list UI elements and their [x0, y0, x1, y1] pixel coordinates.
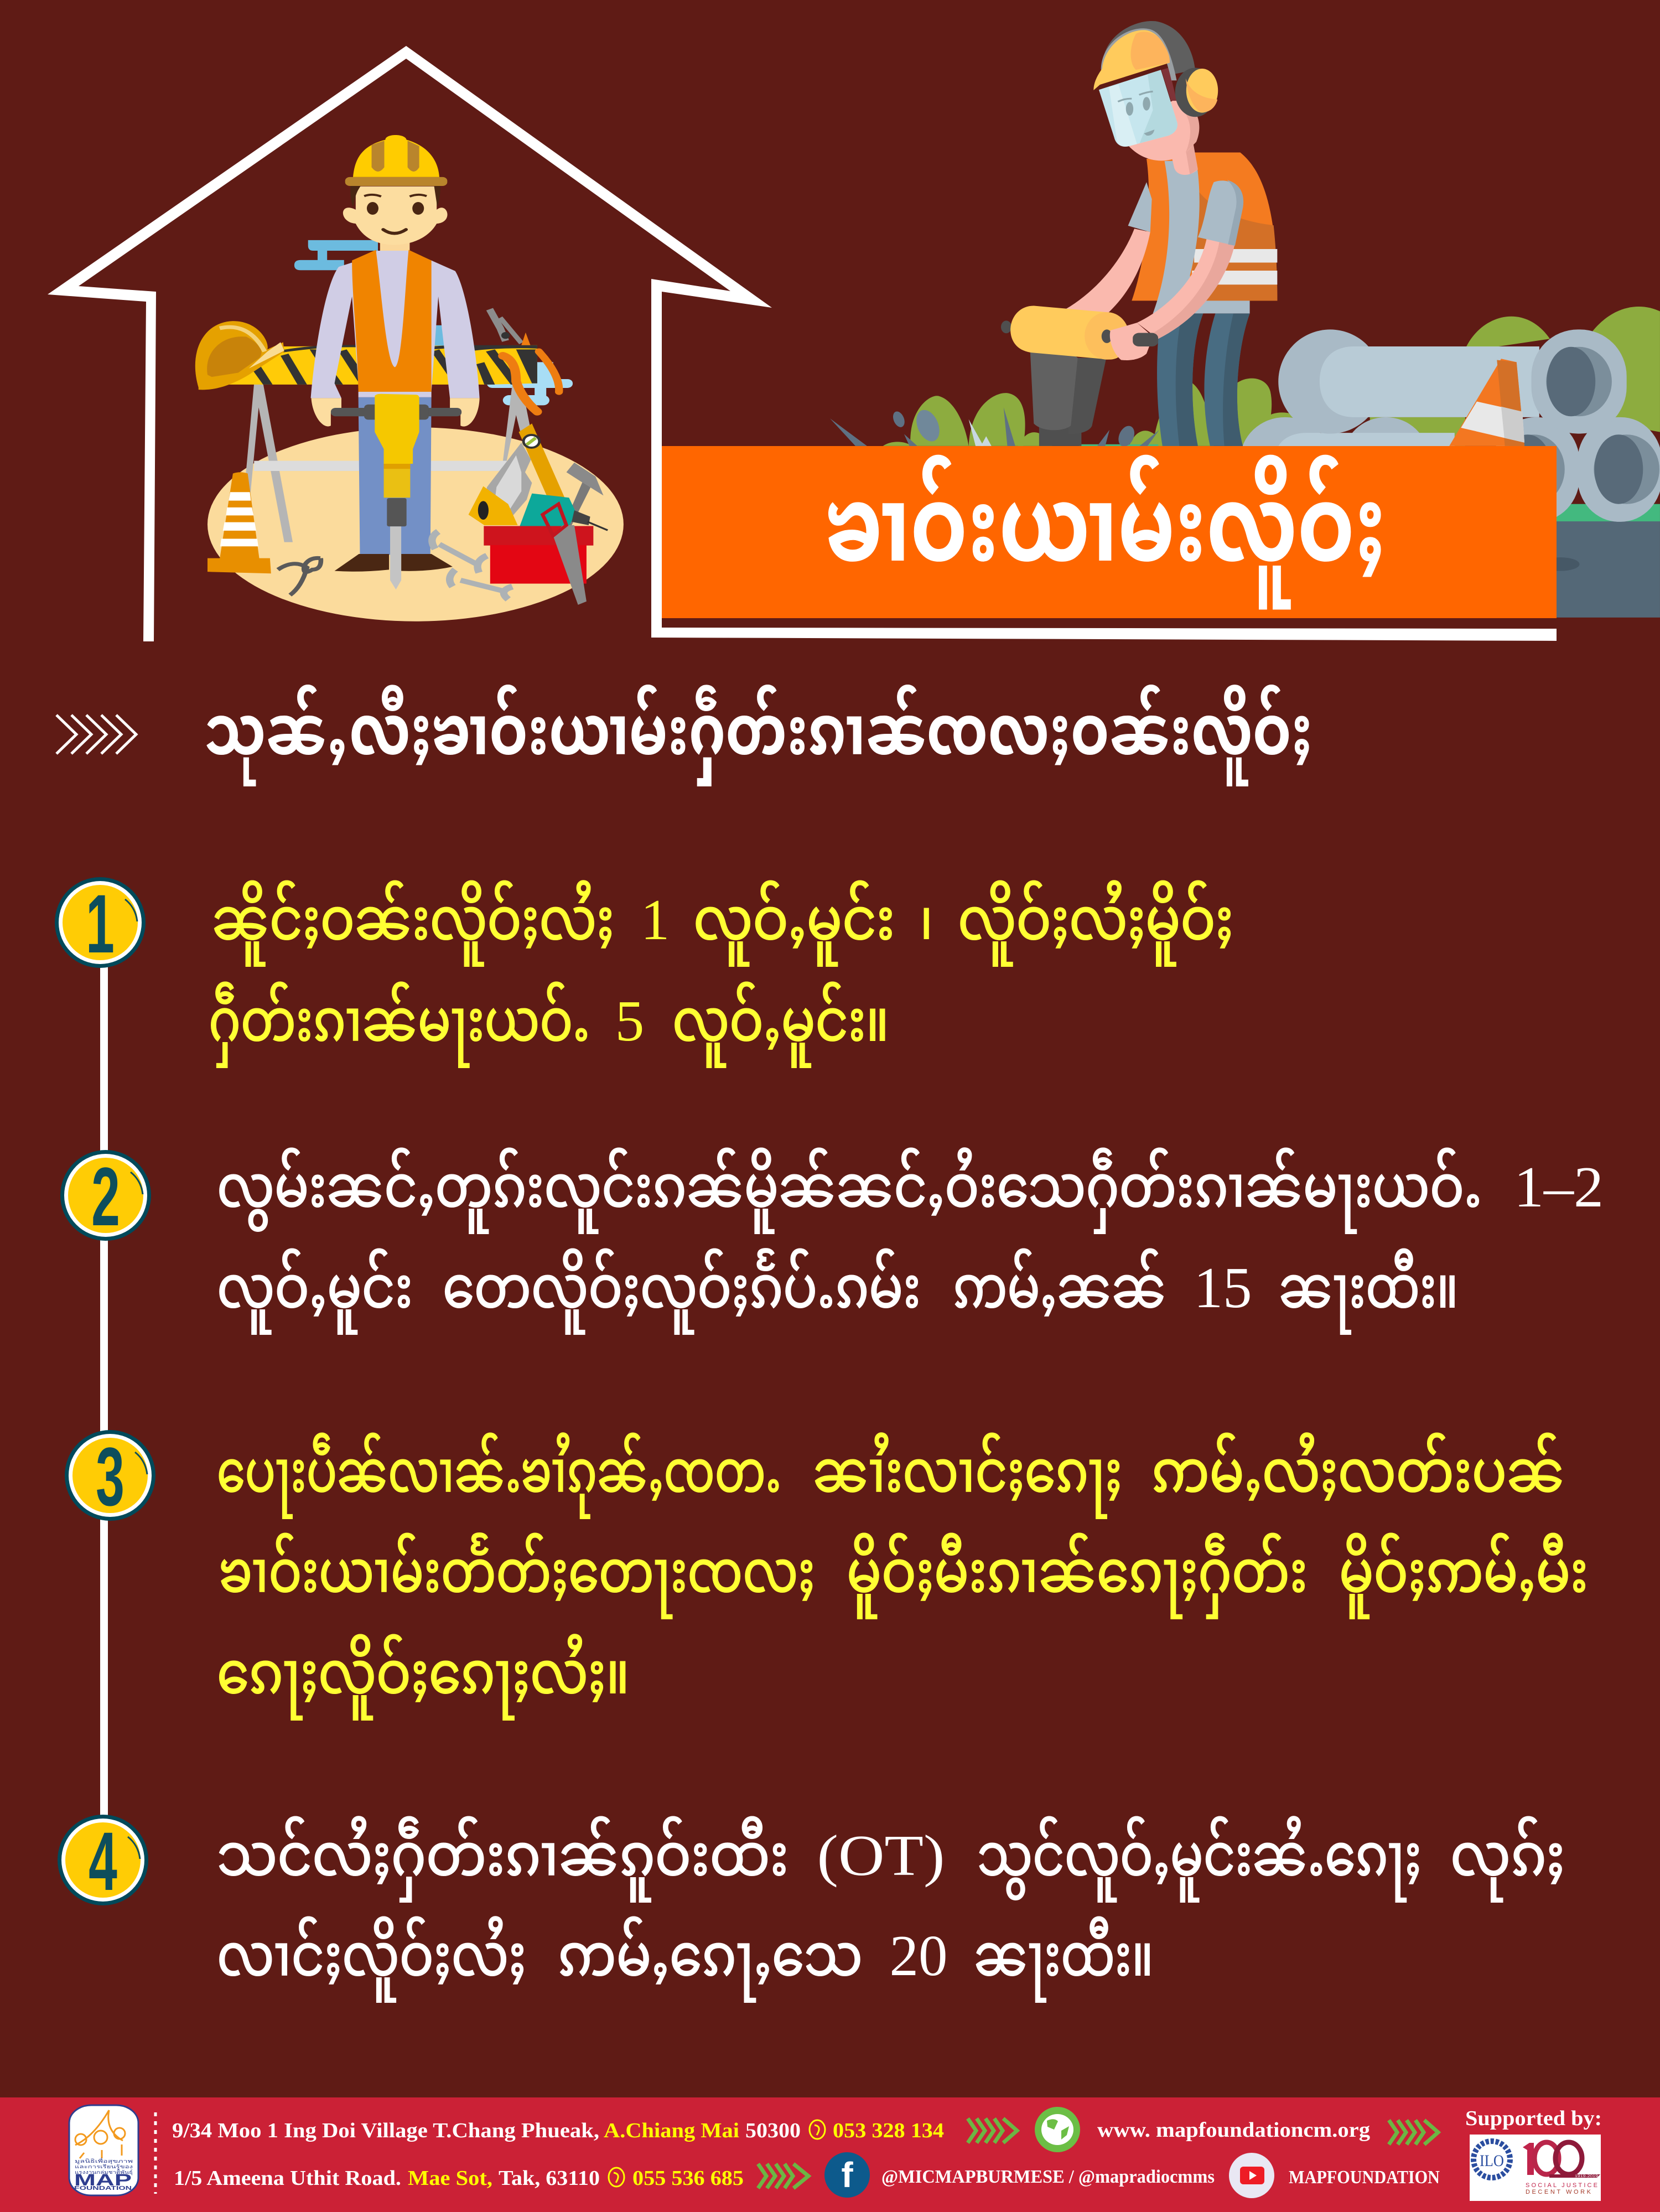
- text: step 3: ပေႃးပဵၼ်လၢၼ်ႉၶၢႆၵုၼ်ႇၸတႉ: [217, 1433, 781, 1519]
- text: step 3: ၶၢဝ်းယၢမ်းတႅတ်ႈတေႃးၸလႈ: [219, 1534, 815, 1619]
- icon: ear defender: [1175, 68, 1215, 117]
- text: Mae Sot address: Mae Sot,: [408, 2167, 492, 2190]
- text: step 4: [217, 1817, 1565, 2002]
- icon: number badge 3: 3: [96, 1431, 124, 1523]
- icon: grass spikes and leaves: [830, 407, 1159, 448]
- icon: ILO 100 logo: SOCIAL JUSTICE: [1526, 2182, 1597, 2189]
- icon: spare hard hat: [195, 321, 284, 390]
- icon: safety vest and torso: [1128, 153, 1277, 313]
- text: step 4: 20: [890, 1923, 947, 1988]
- text: step 4: ဢမ်ႇၵေႃႇသေ: [558, 1917, 863, 2002]
- text: step 4: သွင်လူဝ်ႇမူင်းၼႆႉၵေႃႈ: [977, 1817, 1422, 1902]
- icon: traffic cone: [1449, 359, 1524, 446]
- text: step 2: [217, 1148, 1604, 1334]
- title: ၶၢဝ်းယၢမ်းလိူဝ်ႈ: [825, 454, 1386, 610]
- text: step 4: လုၵ်ႈ: [1450, 1817, 1565, 1902]
- step 1: [55, 877, 1233, 1068]
- icon: phone: [810, 2120, 825, 2139]
- icon: safety vest: [352, 250, 432, 392]
- text: Chiang Mai address: 50300: [745, 2119, 801, 2142]
- icon: hammer: [564, 463, 604, 525]
- icon: pliers: [278, 558, 321, 595]
- icon: MAP Foundation logo: แรงงานกลุ่มชาติพันธุ์: [75, 2169, 133, 2175]
- icon: number badge 4: [58, 1815, 148, 1908]
- text: step 3: ၵေႃႈလိူဝ်ႈၵေႃႈလႆႈ။: [217, 1635, 630, 1720]
- illustration: road worker with face shield and pipes: [830, 21, 1660, 618]
- text: step 3: မိူဝ်ႈမီးၵၢၼ်ၵေႃႈႁဵတ်း: [847, 1534, 1308, 1619]
- icon: bushes: [883, 307, 1660, 446]
- text: step 2: ၼႃးထီး။: [1279, 1250, 1459, 1334]
- text: step 4: (OT): [817, 1823, 945, 1888]
- icon: ground: [1556, 521, 1660, 618]
- step 4: [58, 1815, 1565, 2002]
- icon: MAP Foundation logo: และการเรียนรู้ของ: [75, 2164, 133, 2170]
- icon: number badge 4: 4: [89, 1815, 117, 1908]
- icon: number badge 2: [60, 1150, 151, 1243]
- icon: saw: [543, 504, 587, 605]
- text: step 4: သင်လႆႈႁဵတ်းၵၢၼ်ၵူဝ်းထီး: [217, 1817, 788, 1902]
- icon: traffic cone: [208, 472, 271, 573]
- divider dashes: [154, 2112, 157, 2194]
- text: step 2: 15: [1194, 1255, 1252, 1320]
- icon: house outline: [48, 46, 1557, 641]
- icon: clouds: [294, 240, 573, 405]
- icon: number badge 2: 2: [91, 1151, 120, 1243]
- icon: green chevrons: [758, 2118, 1438, 2188]
- step 3: [65, 1430, 1588, 1720]
- icon: MAP Foundation logo: MAP: [74, 2171, 132, 2189]
- text: step 1: ႁဵတ်းၵၢၼ်မႃးယဝ်ႉ: [209, 982, 590, 1068]
- icon: large pliers: [490, 309, 559, 412]
- text: step 2: ဢမ်ႇၼၼ်: [953, 1249, 1166, 1320]
- text: Mae Sot address: Tak, 63110: [499, 2167, 600, 2190]
- icon: yellow handle tool: [469, 486, 518, 525]
- icon: MAP Foundation logo: FOUNDATION: [74, 2185, 132, 2192]
- text: step 2: 1–2: [1514, 1154, 1604, 1219]
- text: Mae Sot address: [174, 2167, 744, 2190]
- text: step 1: ၼိူင်ႈဝၼ်းလိူဝ်ႈလႆႈ: [212, 881, 614, 966]
- text: step 2: တေလိူဝ်ႈလူဝ်ႈၵႅပ်ႉၵမ်း: [443, 1249, 921, 1334]
- icon: facebook: [824, 2152, 870, 2198]
- icon: number badge 1: 1: [86, 878, 115, 970]
- icon: shoes: [335, 554, 453, 572]
- text: step 2: လွမ်းၼင်ႇတူၵ်းလူင်းၵၼ်မိူၼ်ၼင်ႇဝႆးသေႁဵတ်းၵၢၼ်မႃးယဝ်ႉ: [217, 1148, 1482, 1234]
- icon: hand saw blade: [484, 443, 532, 521]
- text: Chiang Mai address: A.Chiang Mai: [604, 2119, 739, 2142]
- icon: ILO 100 logo: [1470, 2135, 1601, 2201]
- text: step 1: ၊: [919, 887, 934, 952]
- text: website: www. mapfoundationcm.org: [1097, 2118, 1370, 2142]
- icon: ground ellipse: [208, 427, 624, 621]
- icon: ILO 100 logo: DECENT WORK: [1526, 2189, 1591, 2195]
- icon: concrete pipes: [1240, 329, 1660, 522]
- text: step 1: 1: [641, 887, 670, 952]
- icon: youtube: [1229, 2153, 1274, 2198]
- icon: sawhorse legs: [243, 384, 532, 542]
- panel: footer: [0, 2097, 1660, 2212]
- icon: number badge 1: [55, 877, 146, 970]
- text: step 4: လၢင်ႈလိူဝ်ႈလႆႈ: [217, 1917, 526, 2002]
- text: step 3: [217, 1433, 1588, 1720]
- icon: red toolbox: [484, 526, 593, 546]
- step 2: [60, 1148, 1604, 1334]
- text: Chiang Mai address: 053 328 134: [833, 2119, 944, 2142]
- icon: striped barrier: [227, 345, 537, 385]
- text: step 1: 5: [615, 988, 644, 1053]
- icon: phone: [609, 2168, 624, 2187]
- text: Chiang Mai address: 9/34 Moo 1 Ing Doi Village T.Chang Phueak,: [172, 2119, 599, 2142]
- heading: section subtitle: [56, 683, 1313, 787]
- icon: globe: [1035, 2107, 1080, 2152]
- illustration: smiling construction worker with jackhammer and tools: [195, 135, 624, 621]
- text: step 3: ၼၢႆးလၢင်ႈၵေႃႈ: [813, 1433, 1122, 1519]
- text: step 4: ၼႃးထီး။: [974, 1918, 1154, 2002]
- icon: arms and shirt: [311, 251, 480, 398]
- icon: chevron arrows: [56, 715, 136, 754]
- icon: face: [343, 187, 447, 245]
- text: Mae Sot address: 1/5 Ameena Uthit Road.: [174, 2167, 401, 2190]
- text: step 3: ဢမ်ႇလႆႈလတ်းပၼ်: [1151, 1433, 1565, 1504]
- icon: legs: [1157, 313, 1250, 446]
- icon: yellow hard hat: [353, 135, 439, 177]
- icon: facebook: f: [841, 2155, 853, 2195]
- icon: hands: [311, 398, 480, 427]
- icon: trousers: [359, 392, 432, 397]
- icon: worker: [311, 135, 480, 589]
- icon: neck and head with shield: [1093, 21, 1218, 175]
- text: supported by: Supported by:: [1465, 2107, 1602, 2130]
- icon: jackhammer: [331, 408, 461, 416]
- panel: orange title banner: [662, 446, 1557, 618]
- text: step 3: မိူဝ်ႈဢမ်ႇမီး: [1339, 1534, 1588, 1619]
- icon: number badge 3: [65, 1430, 155, 1523]
- text: step 1: လိူဝ်ႈလႆႈမိူဝ်ႈ: [958, 881, 1233, 966]
- text: youtube channel: MAPFOUNDATION: [1289, 2167, 1440, 2188]
- text: step 1: [209, 881, 1233, 1068]
- icon: MAP Foundation logo: มูลนิธิเพื่อสุขภาพ: [75, 2157, 133, 2164]
- icon: timeline line: [100, 963, 108, 1821]
- icon: hard hat: [1093, 30, 1170, 90]
- icon: wrenches: [432, 531, 512, 599]
- text: step 1: လူဝ်ႇမူင်း: [693, 881, 895, 966]
- subtitle text: သုၼ်ႇလီႈၶၢဝ်းယၢမ်းႁဵတ်းၵၢၼ်ၸလႈဝၼ်းလိူဝ်ႈ: [204, 683, 1313, 787]
- icon: spirit level: [518, 423, 567, 510]
- icon: teal drill: [520, 494, 576, 526]
- text: Chiang Mai address: [172, 2119, 944, 2142]
- text: facebook handles: @MICMAPBURMESE / @mapradiocmms: [881, 2167, 1215, 2187]
- icon: MAP Foundation logo: [69, 2105, 138, 2195]
- text: step 1: လူဝ်ႇမူင်း။: [672, 982, 889, 1068]
- icon: ILO 100 logo: ILO: [1480, 2152, 1504, 2170]
- text: step 2: လူဝ်ႇမူင်း: [217, 1249, 413, 1334]
- text: Mae Sot address: 055 536 685: [632, 2167, 744, 2190]
- icon: ILO 100 logo: 1919-2019: [1575, 2175, 1599, 2178]
- icon: jackhammer and arms: [1001, 180, 1243, 446]
